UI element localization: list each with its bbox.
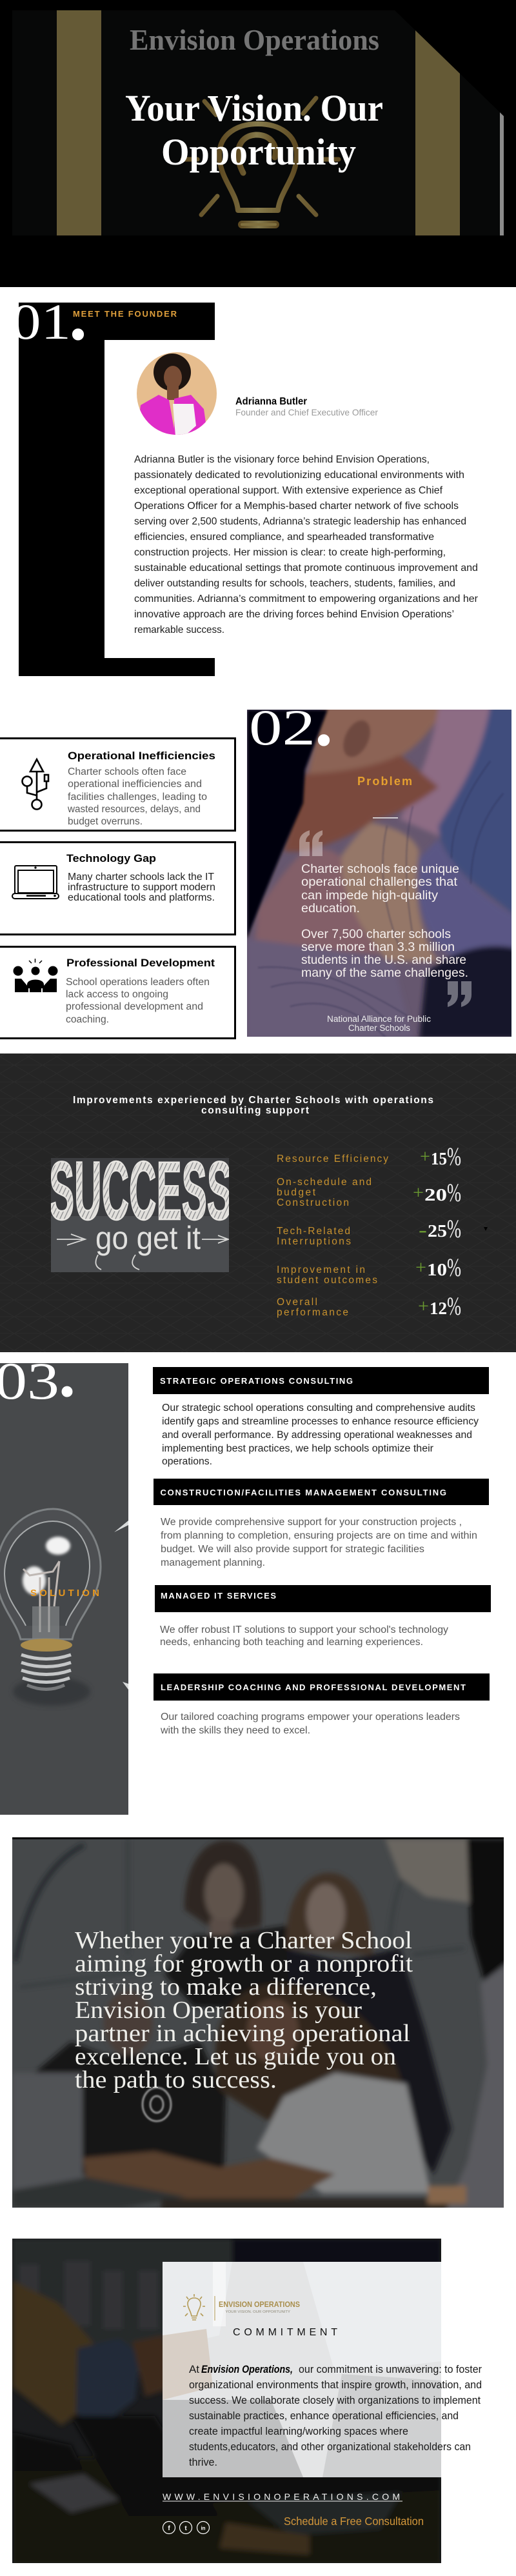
chalkboard success image xyxy=(51,1158,229,1272)
stat labels: Improvement in xyxy=(277,1264,365,1275)
service body text: management planning. xyxy=(161,1557,265,1568)
service body text xyxy=(160,1712,460,1736)
panel: meet the founder xyxy=(11,275,479,676)
service body text: and overall performance. By addressing operational weaknesses and xyxy=(162,1430,472,1441)
text: operational inefficiencies: budget overruns. xyxy=(68,816,143,827)
text: professional development: professional development and xyxy=(66,1001,203,1012)
founder biography: Adrianna Butler is the visionary force behind Envision Operations, xyxy=(134,454,430,465)
stat values: - xyxy=(419,1221,427,1241)
stat values: + xyxy=(420,1147,430,1167)
text: technology gap: infrastructure to support modern xyxy=(68,882,215,893)
social media icons: t xyxy=(184,2525,187,2532)
heading: problem: Problem xyxy=(357,775,412,788)
stat labels: budget xyxy=(277,1187,316,1198)
stat values: 25 xyxy=(428,1221,447,1241)
commitment body text: create impactful learning/working spaces where xyxy=(189,2426,408,2437)
service body text: Our tailored coaching programs empower your operations leaders xyxy=(161,1712,460,1722)
service body text: from planning to completion, ensuring projects are on time and within xyxy=(161,1530,477,1541)
text: professional development: coaching. xyxy=(66,1014,109,1025)
stat labels: student outcomes xyxy=(277,1275,377,1286)
source attribution xyxy=(327,1014,431,1033)
quote text: education. xyxy=(301,901,360,915)
logo: envision operations: YOUR VISION. OUR OPPORTUNITY xyxy=(226,2310,291,2314)
commitment body text: thrive. xyxy=(189,2457,217,2468)
stat values: 15 xyxy=(431,1149,447,1168)
logo: envision operations xyxy=(183,2294,300,2321)
founder portrait xyxy=(135,351,219,436)
logo: envision operations: ENVISION OPERATIONS xyxy=(219,2301,300,2309)
social media icons xyxy=(163,2521,209,2534)
text: operational inefficiencies xyxy=(67,750,215,827)
text: operational inefficiencies: wasted resources, delays, and xyxy=(67,804,201,815)
founder biography: deliver outstanding results for schools, teachers, students, families, and xyxy=(134,578,455,589)
service body text: implementing best practices, we help schools optimize their xyxy=(162,1443,433,1454)
heading: hero title: Your Vision. Our xyxy=(125,87,383,129)
commitment body text: students,educators, and other organizational stakeholders can xyxy=(189,2441,471,2453)
heading: meet the founder: MEET THE FOUNDER xyxy=(73,309,177,319)
icon: meeting people xyxy=(13,959,58,992)
commitment body text xyxy=(189,2364,482,2468)
quote text: students in the U.S. and share xyxy=(301,953,466,967)
founder biography: remarkable success. xyxy=(134,624,224,635)
heading: improvements: consulting support xyxy=(201,1105,309,1116)
service: managed IT services: MANAGED IT SERVICES xyxy=(161,1591,276,1601)
quote text: operational challenges that xyxy=(301,875,458,889)
founder biography: exceptional operational support. With extensive experience as Chief xyxy=(134,485,443,496)
stat labels xyxy=(277,1153,388,1318)
section number 02: . xyxy=(315,681,333,761)
service: construction and facilities management: CONSTRUCTION/FACILITIES MANAGEMENT CONSULTING xyxy=(160,1488,446,1497)
section number 02 xyxy=(249,681,333,761)
callout text: Whether you're a Charter School xyxy=(75,1927,412,1954)
founder biography: construction projects. Her mission is clear: to create high-performing, xyxy=(134,547,446,558)
service body text: identify gaps and streamline processes to enhance resource efficiency xyxy=(162,1416,479,1427)
commitment body text: sustainable practices, enhance operational efficiencies, and xyxy=(189,2410,459,2422)
commitment body text: Envision Operations, xyxy=(201,2364,293,2375)
source attribution: National Alliance for Public xyxy=(327,1014,431,1024)
quote text: can impede high-quality xyxy=(301,888,438,903)
callout text: the path to success. xyxy=(75,2066,277,2093)
panel: solution lightbulb xyxy=(0,1337,128,1815)
text: professional development: School operations leaders often xyxy=(66,977,210,988)
card: operational inefficiencies xyxy=(0,738,235,831)
text: technology gap: Technology Gap xyxy=(66,852,156,864)
text: technology gap: educational tools and platforms. xyxy=(68,892,215,903)
translucent commitment card xyxy=(163,2262,441,2477)
text: technology gap: Many charter schools lack the IT xyxy=(68,872,215,883)
stat labels: On-schedule and xyxy=(277,1177,372,1188)
panel: improvements statistics: SUCCESS xyxy=(49,1145,232,1237)
chalkboard success image: go get it xyxy=(95,1220,201,1256)
panel: hero banner xyxy=(0,0,516,287)
callout text: excellence. Let us guide you on xyxy=(75,2043,396,2070)
handshake photo xyxy=(12,2239,441,2564)
service: leadership coaching xyxy=(154,1673,490,1736)
stat values: + xyxy=(413,1183,424,1203)
panel: improvements statistics xyxy=(0,1053,516,1352)
team photo xyxy=(12,1837,510,2213)
canyon photo background xyxy=(247,706,516,1039)
stat values: 12 xyxy=(430,1299,447,1318)
stat values: + xyxy=(415,1258,426,1278)
commitment body text: our commitment is unwavering: to foster xyxy=(299,2364,482,2375)
stat values: % xyxy=(447,1253,461,1282)
stat labels: performance xyxy=(277,1307,348,1318)
call to action: Schedule a Free Consultation xyxy=(284,2515,424,2528)
text: operational inefficiencies: facilities challenges, leading to xyxy=(68,792,207,803)
callout text: aiming for growth or a nonprofit xyxy=(75,1950,413,1977)
service body text: Our strategic school operations consulting and comprehensive audits xyxy=(162,1403,475,1413)
callout text: Envision Operations is your xyxy=(75,1997,362,2024)
heading: improvements xyxy=(73,1095,433,1116)
founder name and role xyxy=(235,396,378,417)
service body text: needs, enhancing both teaching and learning experiences. xyxy=(160,1637,423,1648)
founder name and role: Founder and Chief Executive Officer xyxy=(235,407,378,417)
service body text: We offer robust IT solutions to support your school's technology xyxy=(160,1624,448,1635)
icon: usb symbol xyxy=(22,759,48,809)
service body text: operations. xyxy=(162,1456,212,1467)
service body text: We provide comprehensive support for your construction projects , xyxy=(161,1517,462,1528)
service body text xyxy=(162,1403,479,1467)
text: professional development xyxy=(66,957,215,1025)
section number 01: . xyxy=(69,275,87,355)
stat labels: Overall xyxy=(277,1297,317,1308)
service: managed IT services xyxy=(155,1585,491,1648)
source attribution: Charter Schools xyxy=(348,1023,410,1033)
quote text: Over 7,500 charter schools xyxy=(301,927,451,941)
stat values: 20 xyxy=(424,1185,447,1204)
text: operational inefficiencies: Charter schools often face xyxy=(68,766,186,777)
icon: gold lightbulb xyxy=(183,78,339,227)
stat values: % xyxy=(447,1178,461,1207)
section number 02: 02 xyxy=(249,699,315,755)
icon: opening quote xyxy=(299,830,322,856)
icon: laptop xyxy=(12,866,59,899)
quote text: serve more than 3.3 million xyxy=(301,940,455,954)
service: leadership coaching: LEADERSHIP COACHING AND PROFESSIONAL DEVELOPMENT xyxy=(161,1682,466,1692)
stat values: % xyxy=(447,1142,461,1171)
stat values: % xyxy=(447,1292,461,1321)
service body text: with the skills they need to excel. xyxy=(160,1725,310,1736)
stat labels: Resource Efficiency xyxy=(277,1153,388,1164)
service: construction and facilities management xyxy=(154,1479,489,1568)
icon: closing quote xyxy=(448,981,471,1007)
stat values: % xyxy=(447,1214,461,1243)
callout text: striving to make a difference, xyxy=(75,1973,377,2001)
card: professional development xyxy=(0,947,235,1039)
service: strategic operations consulting: STRATEGIC OPERATIONS CONSULTING xyxy=(160,1376,353,1386)
social media icons: f xyxy=(168,2525,170,2532)
founder biography: Operations Officer for a Memphis-based charter network of five schools xyxy=(134,501,459,512)
heading: improvements: Improvements experienced by Charter Schools with operations xyxy=(73,1095,433,1106)
callout text xyxy=(75,1927,413,2093)
service body text: budget. We will also provide support for strategic facilities xyxy=(161,1544,424,1555)
section number 01: 01 xyxy=(11,294,71,350)
section number 03: . xyxy=(59,1337,75,1411)
founder name and role: Adrianna Butler xyxy=(235,396,307,407)
stat values: + xyxy=(418,1297,429,1317)
heading: hero title xyxy=(125,87,383,173)
card: technology gap xyxy=(0,843,235,934)
founder biography: passionately dedicated to revolutionizing educational environments with xyxy=(134,470,464,481)
service: strategic operations consulting xyxy=(153,1367,489,1467)
founder biography xyxy=(134,454,479,635)
commitment body text: success. We collaborate closely with organizations to implement xyxy=(189,2395,481,2406)
heading: hero title: Opportunity xyxy=(161,131,356,173)
stat values xyxy=(413,1142,461,1321)
founder biography: communities. Adrianna’s commitment to empowering organizations and her xyxy=(134,594,479,604)
founder biography: sustainable educational settings that promote continuous improvement and xyxy=(134,563,478,574)
stat labels: Interruptions xyxy=(277,1236,351,1247)
heading: company name: Envision Operations xyxy=(130,23,379,56)
heading: commitment: COMMITMENT xyxy=(233,2327,337,2338)
panel: commitment xyxy=(12,2239,482,2564)
text: professional development: Professional Development xyxy=(66,957,215,969)
quote text: many of the same challenges. xyxy=(301,966,468,980)
callout text: partner in achieving operational xyxy=(75,2020,410,2047)
founder biography: serving over 2,500 students, Adrianna’s strategic leadership has enhanced xyxy=(134,516,466,527)
website link: WWW.ENVISIONOPERATIONS.COM xyxy=(163,2491,400,2502)
text: operational inefficiencies: operational inefficiencies and xyxy=(68,779,202,790)
commitment body text: At xyxy=(189,2364,199,2375)
quote text: Charter schools face unique xyxy=(301,862,459,876)
heading: solution: SOLUTION xyxy=(30,1588,99,1599)
social media icons: in xyxy=(201,2525,206,2531)
text: operational inefficiencies: Operational Inefficiencies xyxy=(68,750,215,762)
founder biography: efficiencies, ensured compliance, and spearheaded transformative xyxy=(134,532,434,543)
stat labels: Construction xyxy=(277,1197,349,1208)
quote text xyxy=(301,862,468,980)
text: professional development: lack access to ongoing xyxy=(66,989,168,1000)
stat labels: Tech-Related xyxy=(277,1226,350,1237)
commitment body text: organizational environments that inspire growth, innovation, and xyxy=(189,2379,482,2391)
service body text xyxy=(160,1624,448,1648)
section number 03 xyxy=(0,1364,72,1399)
text: technology gap xyxy=(66,852,215,903)
panel: team photo callout xyxy=(12,1837,510,2213)
service body text xyxy=(161,1517,477,1568)
lightbulb photo xyxy=(0,1363,128,1815)
stat values: 10 xyxy=(427,1260,447,1279)
section number 01 xyxy=(19,305,84,341)
panel: problem xyxy=(247,710,511,1037)
founder biography: innovative approach are the driving forces behind Envision Operations’ xyxy=(134,609,454,620)
